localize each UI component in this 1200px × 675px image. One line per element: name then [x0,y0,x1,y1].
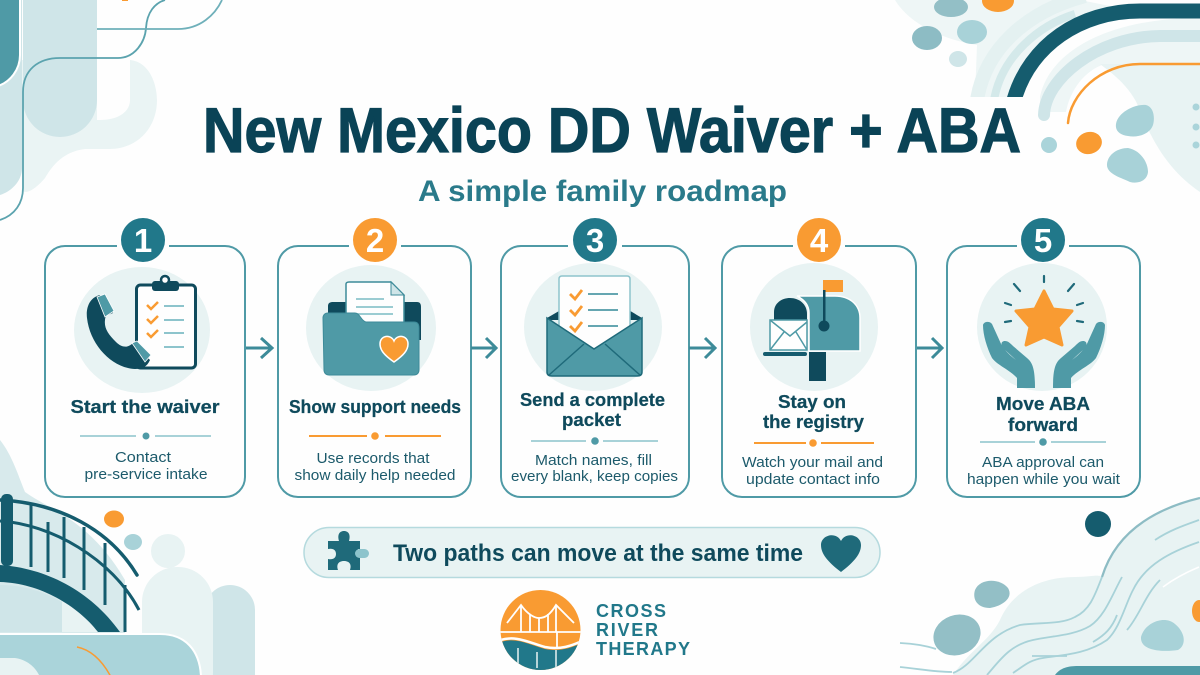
subtitle: A simple family roadmap [418,175,787,208]
step 2 description [294,451,456,484]
logo wordmark: THERAPY [596,639,690,659]
step 1 number: 1 [134,222,152,259]
decoration: top-right arcs and blobs [895,0,1200,192]
step 3 heading: Send a complete [520,389,665,410]
icon: hands holding star [977,263,1107,391]
step 5 divider [980,438,1106,446]
step 2 heading: Show support needs [289,396,461,417]
arrow 3 to 4 [689,338,715,358]
step 4 description: Watch your mail and [742,455,883,471]
title: New Mexico DD Waiver + ABA [203,96,1021,166]
step 4 description [742,455,883,488]
step 1 description: Contact [115,450,171,466]
step 2 number: 2 [366,222,384,259]
step 1 heading: Start the waiver [70,396,220,417]
step 3 heading [520,389,665,430]
step 2 description: show daily help needed [294,468,456,484]
callout: two paths banner [304,528,880,578]
step 4 divider [754,439,874,447]
step 5 heading: forward [1008,414,1078,435]
step 4 heading: Stay on [778,391,846,412]
step 4 heading: the registry [763,411,865,432]
icon: heart [821,535,861,572]
step 1 divider [80,432,211,440]
step 2 description: Use records that [316,451,430,467]
step 4 number: 4 [810,222,829,259]
icon: puzzle piece [328,531,369,570]
step 4 heading [763,391,865,432]
step 5 number [1021,218,1065,262]
step 3 heading: packet [562,409,621,430]
step 2 divider [309,432,441,440]
logo mark [500,590,580,670]
step 5 description [967,455,1120,488]
icon: folder with heart [306,265,436,391]
arrow 1 to 2 [246,338,272,358]
step 1 description: pre-service intake [84,467,208,483]
panel: step 4 [722,218,916,497]
logo wordmark: CROSS [596,601,666,621]
logo wordmark [596,601,690,659]
step 3 number [573,218,617,262]
step 5 description: happen while you wait [967,472,1120,488]
step 3 number: 3 [586,222,604,259]
step 5 heading: Move ABA [996,393,1090,414]
step 3 divider [531,437,658,445]
step 1 number [121,218,165,262]
step 1 description [84,450,208,483]
step 5 number: 5 [1034,222,1052,259]
logo wordmark: RIVER [596,620,658,640]
panel: step 3 [501,218,689,497]
step 3 description [511,453,678,485]
icon: envelope with checklist [524,263,662,391]
panel: step 5 [947,218,1140,497]
step 4 number [797,218,841,262]
decoration: top-left shapes [0,0,222,220]
step 4 description: update contact info [746,472,880,488]
banner text: Two paths can move at the same time [393,540,803,567]
decoration: bottom-right waves and stones [900,498,1200,675]
step 5 description: ABA approval can [982,455,1104,471]
step 3 description: Match names, fill [535,453,652,469]
arrow 4 to 5 [917,338,942,358]
step 2 number [353,218,397,262]
step 3 description: every blank, keep copies [511,469,678,485]
panel: step 1 [45,218,245,497]
panel: step 2 [278,218,471,497]
step 5 heading [996,393,1090,435]
icon: mailbox with flag [750,263,878,391]
decoration: bottom-left bridge and shapes [0,440,255,675]
icon: phone and checklist [74,267,210,393]
arrow 2 to 3 [471,338,496,358]
logo: Cross River Therapy [498,590,690,675]
